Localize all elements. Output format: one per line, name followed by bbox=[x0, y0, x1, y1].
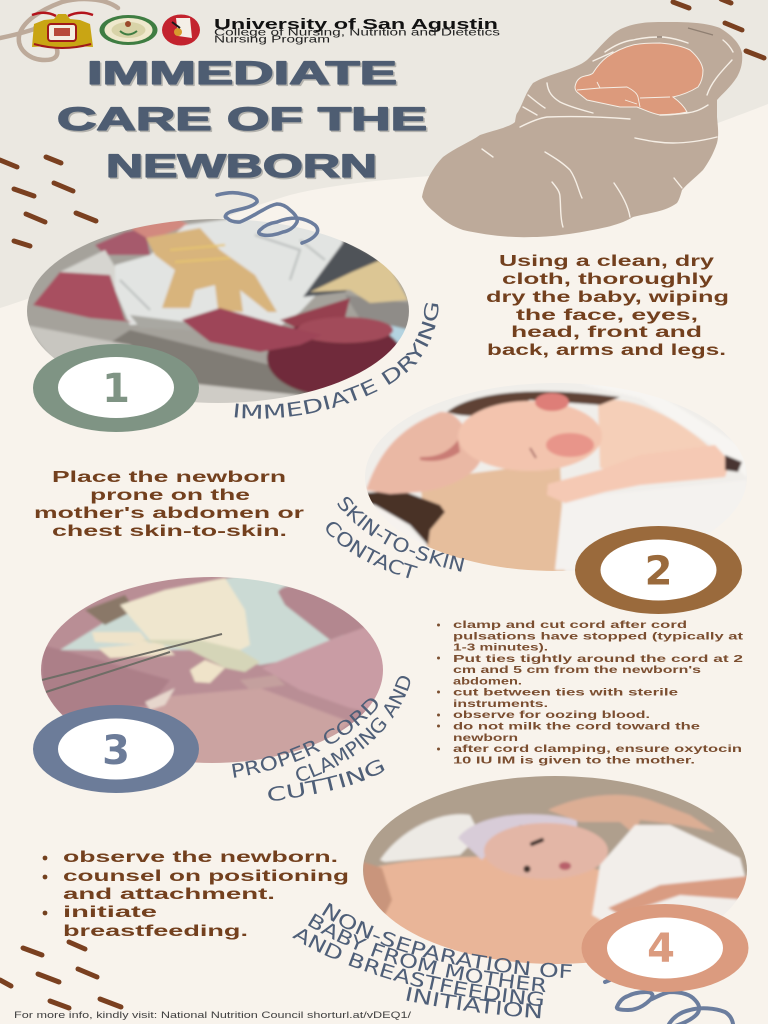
badge 1 bbox=[33, 344, 199, 432]
photo 2: skin to skin contact bbox=[366, 388, 744, 571]
bullets: cord steps bbox=[437, 624, 440, 750]
text: immediate drying description: cloth, thoroughly bbox=[502, 271, 714, 288]
badge 4 bbox=[582, 904, 748, 992]
label: proper cord clamping and cutting: CLAMPING AND bbox=[296, 676, 410, 781]
title bbox=[57, 55, 428, 186]
label: non-separation and breastfeeding initiation: AND BREASTFEEDING bbox=[292, 928, 543, 1006]
badge 3 bbox=[33, 705, 199, 793]
top background shape bbox=[0, 0, 768, 308]
text: skin-to-skin description bbox=[34, 469, 304, 540]
label: proper cord clamping and cutting bbox=[232, 676, 410, 801]
header logos bbox=[32, 13, 200, 49]
text: cord clamping steps: newborn bbox=[453, 732, 518, 744]
text: immediate drying description bbox=[486, 253, 729, 359]
label: non-separation and breastfeeding initiation bbox=[292, 902, 572, 1018]
title: NEWBORN bbox=[106, 148, 377, 184]
label: proper cord clamping and cutting: PROPER CORD bbox=[232, 698, 378, 778]
text: cord clamping steps: cut between ties with sterile bbox=[453, 686, 678, 698]
decoration: blue squiggle over photo 1 bbox=[217, 193, 318, 243]
badge 1: 1 bbox=[102, 366, 130, 412]
text: cord clamping steps bbox=[437, 619, 744, 766]
badge 3: 3 bbox=[102, 728, 130, 774]
text: skin-to-skin description: chest skin-to-skin. bbox=[52, 523, 287, 540]
text: breastfeeding steps: and attachment. bbox=[63, 886, 275, 903]
decoration: blue squiggle bottom right bbox=[605, 980, 733, 1024]
label: non-separation and breastfeeding initiation: INITIATION bbox=[406, 987, 541, 1018]
text: immediate drying description: the face, eyes, bbox=[516, 307, 698, 324]
text: immediate drying description: dry the baby, wiping bbox=[486, 289, 729, 306]
badge 4: 4 bbox=[647, 926, 675, 972]
text: immediate drying description: back, arms and legs. bbox=[487, 342, 726, 359]
title: CARE OF THE bbox=[57, 101, 427, 137]
text: cord clamping steps: clamp and cut cord after cord bbox=[453, 619, 687, 631]
photo 4: non-separation and breastfeeding bbox=[360, 770, 752, 970]
text: skin-to-skin description: prone on the bbox=[90, 487, 251, 504]
text: cord clamping steps: Put ties tightly around the cord at 2 bbox=[453, 653, 743, 665]
text: breastfeeding steps: initiate bbox=[63, 904, 158, 921]
decoration: tan squiggle bbox=[0, 0, 118, 60]
text: cord clamping steps: abdomen. bbox=[453, 676, 522, 688]
text: cord clamping steps: after cord clamping, ensure oxytocin bbox=[453, 743, 742, 755]
text: cord clamping steps: instruments. bbox=[453, 698, 548, 710]
photo 1: drying the newborn bbox=[27, 219, 409, 403]
text: cord clamping steps: observe for oozing blood. bbox=[453, 709, 650, 721]
label: skin-to-skin contact: SKIN-TO-SKIN bbox=[337, 496, 464, 572]
baby face and arms bbox=[575, 43, 703, 115]
title: NEWBORN bbox=[108, 150, 378, 186]
label: proper cord clamping and cutting: CUTTING bbox=[268, 760, 384, 801]
text: breastfeeding steps: breastfeeding. bbox=[63, 923, 248, 940]
text: cord clamping steps: pulsations have stopped (typically at bbox=[453, 630, 744, 642]
text: cord clamping steps: 10 IU IM is given to the mother. bbox=[453, 754, 695, 766]
label: non-separation and breastfeeding initiation: BABY FROM MOTHER bbox=[308, 913, 546, 992]
photo 3: cord clamping and cutting bbox=[41, 577, 383, 763]
decoration: brown dashes bottom left bbox=[0, 942, 121, 1008]
logo: university crest bbox=[32, 13, 93, 49]
decoration: brown dashes left bbox=[0, 157, 96, 246]
footer source note: For more info, kindly visit: National Nutrition Council shorturl.at/vDEQ1/ bbox=[14, 1010, 411, 1021]
header institution text: University of San Agustin bbox=[214, 16, 498, 33]
title: CARE OF THE bbox=[58, 102, 428, 138]
header institution text bbox=[214, 16, 500, 46]
label: immediate drying: IMMEDIATE DRYING bbox=[234, 303, 438, 419]
header institution text: College of Nursing, Nutrition and Dietetics bbox=[214, 28, 500, 38]
text: breastfeeding steps bbox=[43, 849, 349, 940]
bullets: breastfeeding steps bbox=[43, 856, 47, 915]
header institution text: Nursing Program bbox=[214, 34, 330, 46]
text: skin-to-skin description: Place the newborn bbox=[52, 469, 286, 486]
label: non-separation and breastfeeding initiation: NON-SEPARATION OF bbox=[322, 902, 572, 978]
text: cord clamping steps: do not milk the cord toward the bbox=[453, 720, 700, 732]
decoration: brown dashes top right bbox=[673, 0, 764, 58]
label: skin-to-skin contact: CONTACT bbox=[326, 522, 418, 578]
text: breastfeeding steps: counsel on positioning bbox=[63, 868, 349, 885]
logo: college seal bbox=[100, 15, 158, 45]
text: breastfeeding steps: observe the newborn. bbox=[63, 849, 338, 866]
text: immediate drying description: head, front and bbox=[511, 324, 702, 341]
logo: nursing seal bbox=[162, 14, 200, 46]
title: IMMEDIATE bbox=[87, 55, 397, 91]
badge 2 bbox=[575, 526, 742, 614]
title: IMMEDIATE bbox=[88, 56, 398, 92]
text: immediate drying description: Using a clean, dry bbox=[499, 253, 715, 270]
text: cord clamping steps: cm and 5 cm from the newborn's bbox=[453, 664, 701, 676]
illustration: swaddled baby bbox=[422, 22, 742, 237]
text: skin-to-skin description: mother's abdomen or bbox=[34, 505, 304, 522]
text: cord clamping steps: 1-3 minutes). bbox=[453, 642, 548, 654]
badge 2: 2 bbox=[645, 548, 672, 594]
